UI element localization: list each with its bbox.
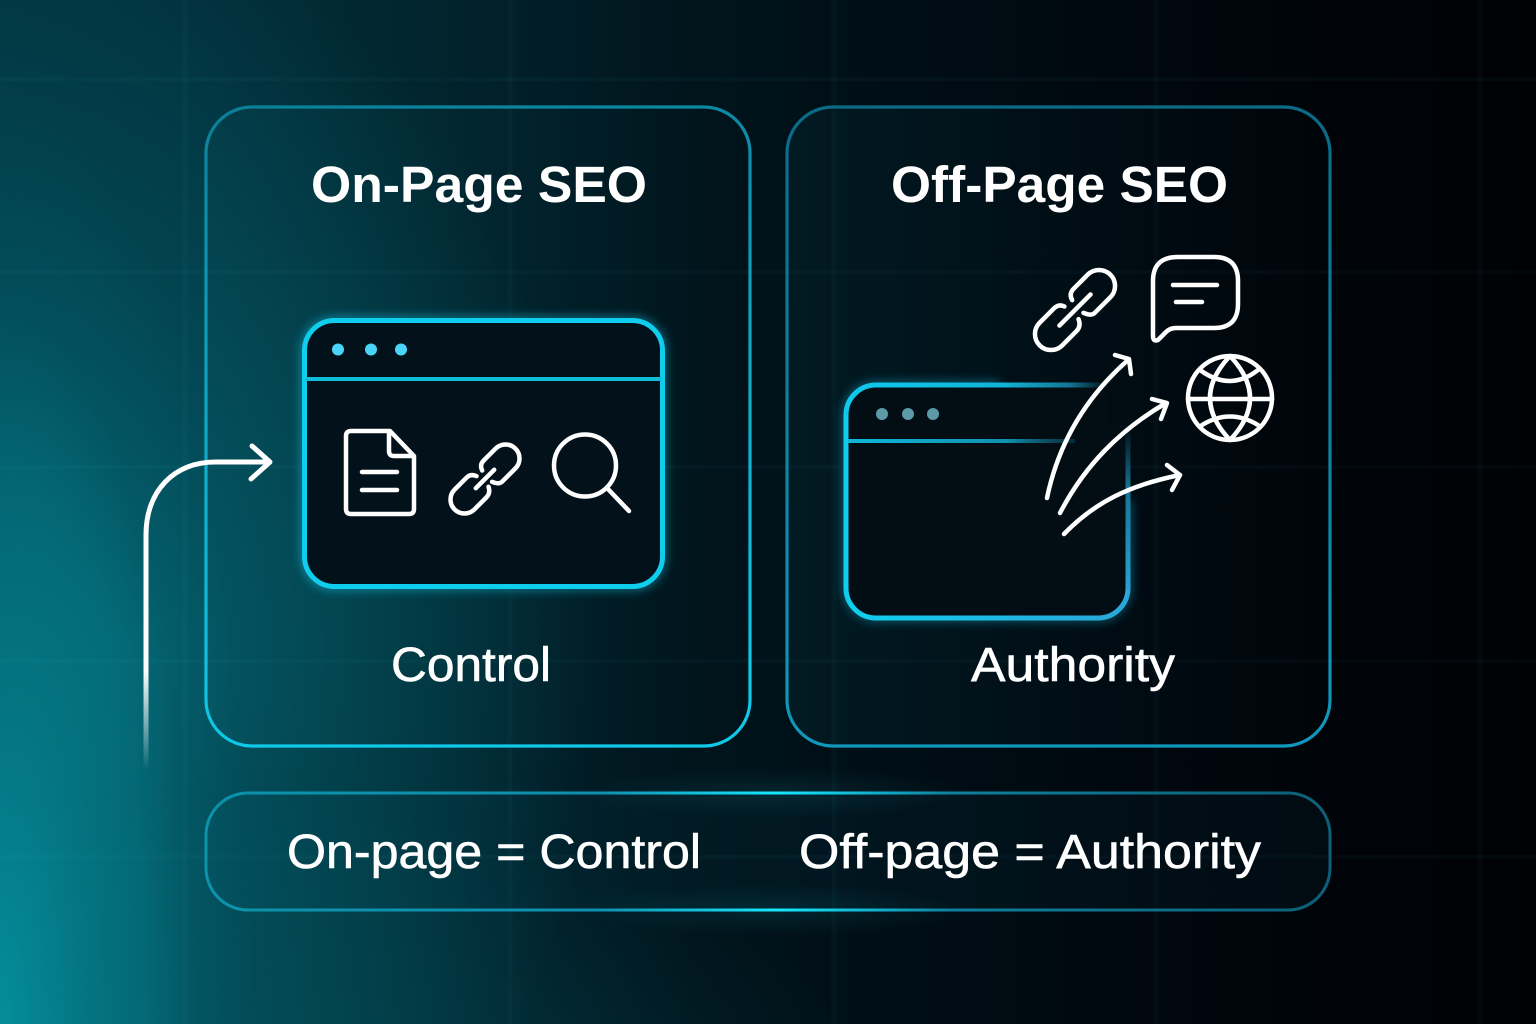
summary bar <box>206 767 1330 936</box>
heading: On-Page SEO: On-Page SEO <box>311 156 647 213</box>
text: off-page equals authority: Off-page = Authority <box>799 826 1261 879</box>
text: on-page equals control: On-page = Control <box>287 826 701 879</box>
icon: link <box>445 439 525 519</box>
icon: magnifier <box>554 434 629 511</box>
panel: off-page SEO <box>787 107 1330 746</box>
icon: speech bubble <box>1153 257 1238 340</box>
arrows: outward <box>1047 355 1180 534</box>
panel: on-page SEO <box>206 107 750 746</box>
icon: link <box>1028 263 1122 357</box>
browser window: on-page <box>304 320 662 586</box>
label: Authority: Authority <box>971 639 1175 692</box>
icon: globe <box>1188 356 1272 440</box>
browser window: off-page <box>846 385 1128 618</box>
heading: Off-Page SEO: Off-Page SEO <box>891 156 1228 213</box>
icon: document <box>346 431 414 514</box>
label: Control: Control <box>391 639 551 692</box>
arrow: into on-page window <box>146 446 270 770</box>
